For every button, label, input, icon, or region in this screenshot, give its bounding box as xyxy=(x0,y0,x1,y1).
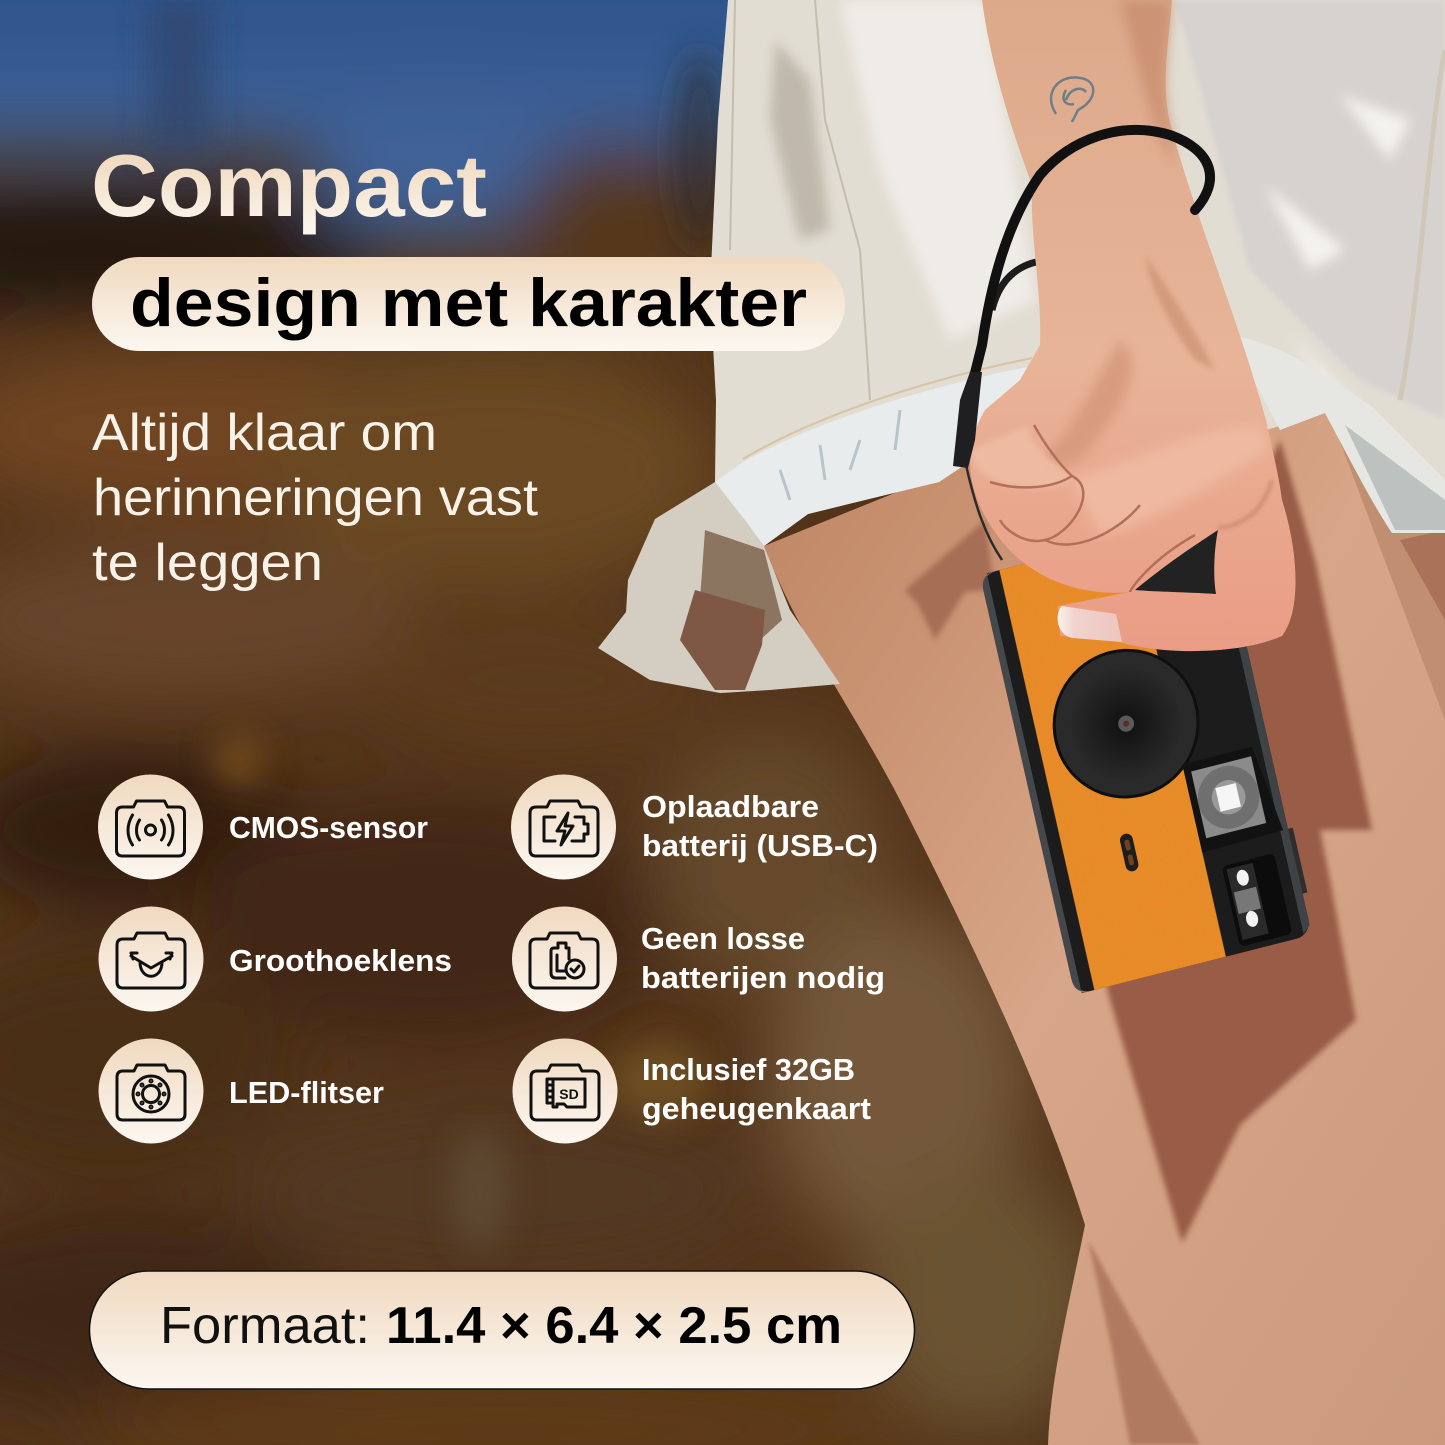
feature: LED-flitser: LED-flitser xyxy=(229,1075,384,1110)
heading: Compact: Compact xyxy=(91,136,487,235)
finger creases xyxy=(990,425,1195,592)
heading pill: design met karakter: design met karakter xyxy=(130,265,807,341)
feature: Inclusief 32GB geheugenkaart: Inclusief 32GB xyxy=(642,1052,855,1087)
camera xyxy=(980,514,1317,995)
woman: leg, shorts, arm and hand xyxy=(598,0,1445,1445)
feature: LED-flitser xyxy=(98,1038,384,1144)
flash unit xyxy=(1222,853,1292,947)
icon: camera with SD card xyxy=(531,1065,599,1120)
size callout pill: 11.4 × 6.4 × 2.5 cm xyxy=(386,1297,842,1355)
size callout pill xyxy=(90,1271,914,1389)
feature: Inclusief 32GB geheugenkaart: geheugenkaart xyxy=(642,1091,871,1126)
icon: camera with battery check xyxy=(530,933,598,988)
heading pill: design met karakter xyxy=(92,257,845,351)
left flap xyxy=(598,482,840,693)
subheading text: Altijd klaar om xyxy=(92,404,437,462)
feature: Oplaadbare batterij: Oplaadbare xyxy=(642,789,819,824)
icon: camera with sensor waves xyxy=(116,801,184,856)
hand gripping the camera xyxy=(970,0,1296,651)
strap clasp xyxy=(953,372,982,468)
icon: camera with LED ring xyxy=(117,1065,185,1120)
thigh xyxy=(764,360,1445,1445)
lens dial xyxy=(1038,633,1214,814)
viewfinder xyxy=(1182,744,1284,853)
thumbnail xyxy=(1058,606,1122,642)
tattoo on wrist xyxy=(1051,77,1093,122)
patterned lining of the flap xyxy=(700,530,782,640)
strap loop behind the wrist xyxy=(992,262,1036,310)
icon: camera with charging battery xyxy=(530,801,598,856)
speaker slot xyxy=(1119,832,1140,873)
feature: Oplaadbare batterij: batterij (USB-C) xyxy=(642,828,878,863)
strap cord to camera xyxy=(966,465,1002,560)
feature: Inclusief 32GB geheugenkaart xyxy=(512,1038,871,1144)
feature: Geen losse batterijen nodig: Geen losse xyxy=(641,921,805,956)
subheading text: herinneringen vast xyxy=(93,469,539,527)
feature: Geen losse batterijen nodig xyxy=(512,906,885,1012)
feature: Groothoeklens xyxy=(98,906,452,1012)
feature: CMOS-sensor: CMOS-sensor xyxy=(229,810,428,845)
subheading text: te leggen xyxy=(92,534,323,592)
frayed ruffle hem xyxy=(715,366,1032,546)
subheading text xyxy=(92,404,539,592)
orange leather band xyxy=(999,537,1226,990)
side wheel xyxy=(1288,828,1307,894)
shorts xyxy=(598,0,1445,693)
black camera top visible between fingers xyxy=(1135,530,1218,594)
feature: Groothoeklens: Groothoeklens xyxy=(229,943,452,978)
feature: Oplaadbare batterij xyxy=(511,774,878,880)
feature: CMOS-sensor xyxy=(98,774,428,880)
size callout pill: Formaat: xyxy=(160,1297,370,1355)
cast shadows on thigh xyxy=(905,415,1445,1445)
icon: camera with wide angle arrows xyxy=(117,933,185,988)
feature: Geen losse batterijen nodig: batterijen nodig xyxy=(641,960,885,995)
wrist strap xyxy=(972,130,1210,385)
brown inner fold xyxy=(680,590,765,690)
camera body xyxy=(980,515,1312,995)
icon: camera with SD card: SD xyxy=(559,1086,579,1102)
